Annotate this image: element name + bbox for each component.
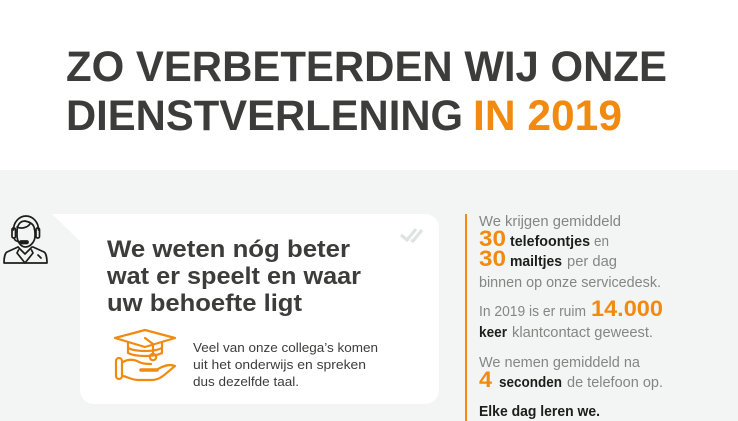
panel: speech bubble [52,214,439,404]
icon: graduation cap on hand [115,330,175,380]
text: statistics column: en [594,234,609,250]
text: statistics column [479,214,663,420]
text: bubble body: uit het onderwijs en spreken [193,357,366,372]
text: statistics column: We nemen gemiddeld na [479,355,641,371]
text: statistics column: de telefoon op. [567,375,663,391]
text: statistics column: 4 [479,367,493,392]
text: statistics column: 30 [479,226,506,251]
text: statistics column: seconden [499,375,562,391]
divider: orange rule [465,214,467,421]
heading: bubble heading [106,236,361,317]
text: bubble body: Veel van onze collega’s komen [193,340,378,355]
title: IN 2019 [473,92,622,140]
heading: bubble heading: uw behoefte ligt [107,290,302,317]
icon: double check marks [401,229,422,241]
text: statistics column: We krijgen gemiddeld [479,214,621,230]
text: statistics column: 30 [479,246,506,271]
title: ZO VERBETERDEN WIJ ONZE [66,43,667,91]
text: statistics column: In 2019 is er ruim [479,304,586,320]
heading: bubble heading: wat er speelt en waar [106,263,361,290]
text: bubble body [193,340,378,389]
text: statistics column: per dag [567,254,617,270]
title [66,43,667,140]
text: statistics column: telefoontjes [510,234,590,250]
text: statistics column: binnen op onze servicedesk. [479,275,661,291]
text: statistics column: mailtjes [510,254,562,270]
text: statistics column: 14.000 [591,296,663,321]
heading: bubble heading: We weten nóg beter [107,236,350,263]
text: statistics column: klantcontact geweest. [512,325,653,341]
text: bubble body: dus dezelfde taal. [193,374,299,389]
icon: customer service agent [4,216,47,263]
title: DIENSTVERLENING [66,92,463,140]
text: statistics column: Elke dag leren we. [479,404,600,420]
text: statistics column: keer [479,325,507,341]
